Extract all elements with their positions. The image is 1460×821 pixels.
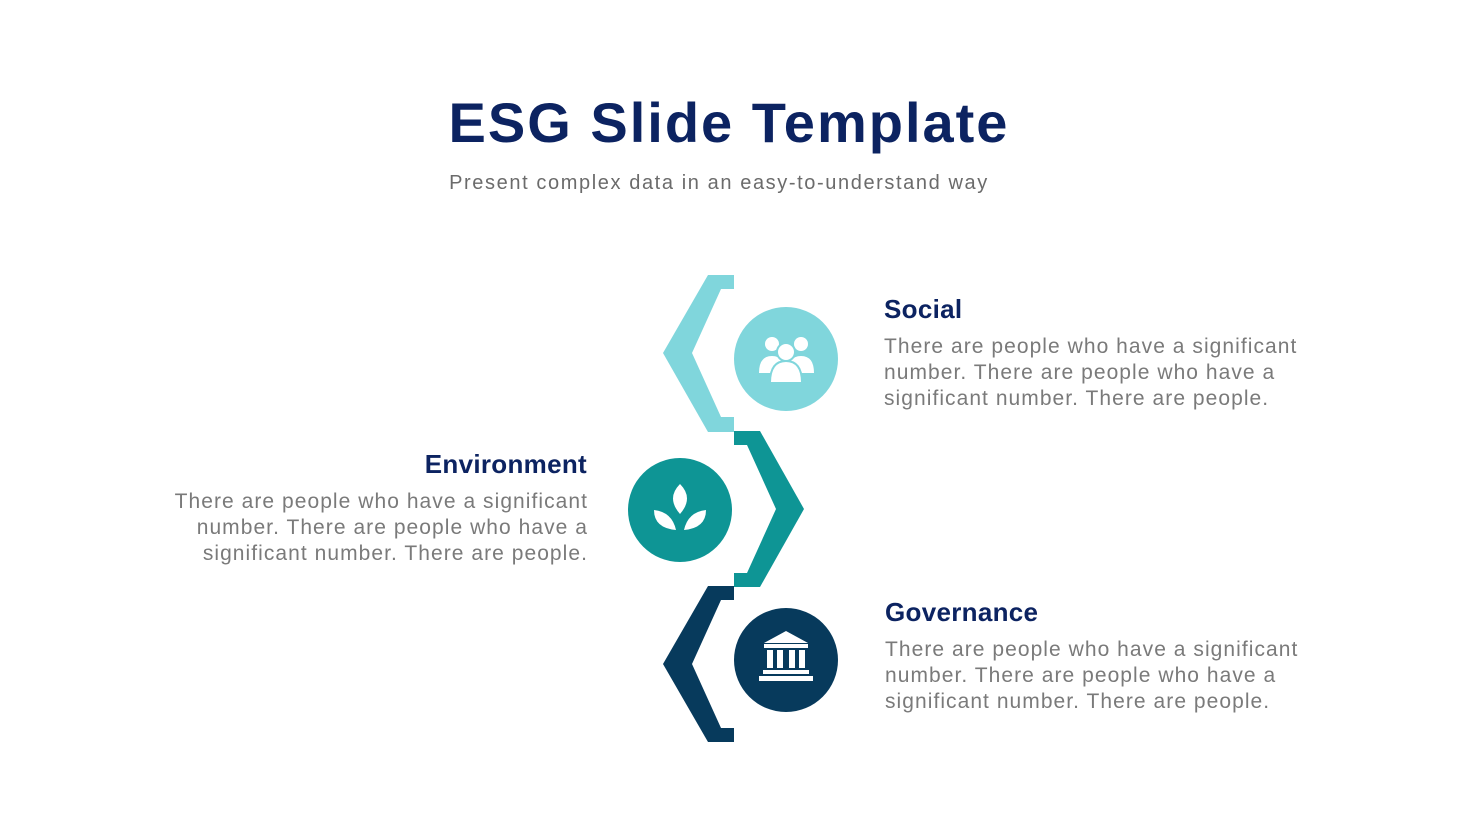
text: environment <box>175 449 588 565</box>
text: governance: Governance <box>885 597 1038 627</box>
title: ESG Slide Template <box>449 91 1009 154</box>
icon: environment leaves <box>628 458 732 562</box>
bracket: governance <box>663 586 734 742</box>
text: environment: Environment <box>425 449 587 479</box>
text: environment: significant number. There are people. <box>203 542 588 565</box>
text: social: number. There are people who have a <box>884 361 1275 384</box>
text: environment: number. There are people who have a <box>197 516 588 539</box>
text: social <box>884 294 1297 410</box>
text: governance: There are people who have a significant <box>885 638 1298 661</box>
bracket: social <box>663 275 734 432</box>
icon: governance building <box>734 608 838 712</box>
text: governance: number. There are people who have a <box>885 664 1276 687</box>
text: social: significant number. There are people. <box>884 387 1269 410</box>
text: governance: significant number. There are people. <box>885 690 1270 713</box>
bracket: environment <box>734 431 804 587</box>
text: governance <box>885 597 1298 713</box>
text: social: Social <box>884 294 962 324</box>
icon: social people <box>734 307 838 411</box>
text: social: There are people who have a significant <box>884 335 1297 358</box>
subtitle: Present complex data in an easy-to-understand way <box>449 172 989 194</box>
text: environment: There are people who have a significant <box>175 490 588 513</box>
